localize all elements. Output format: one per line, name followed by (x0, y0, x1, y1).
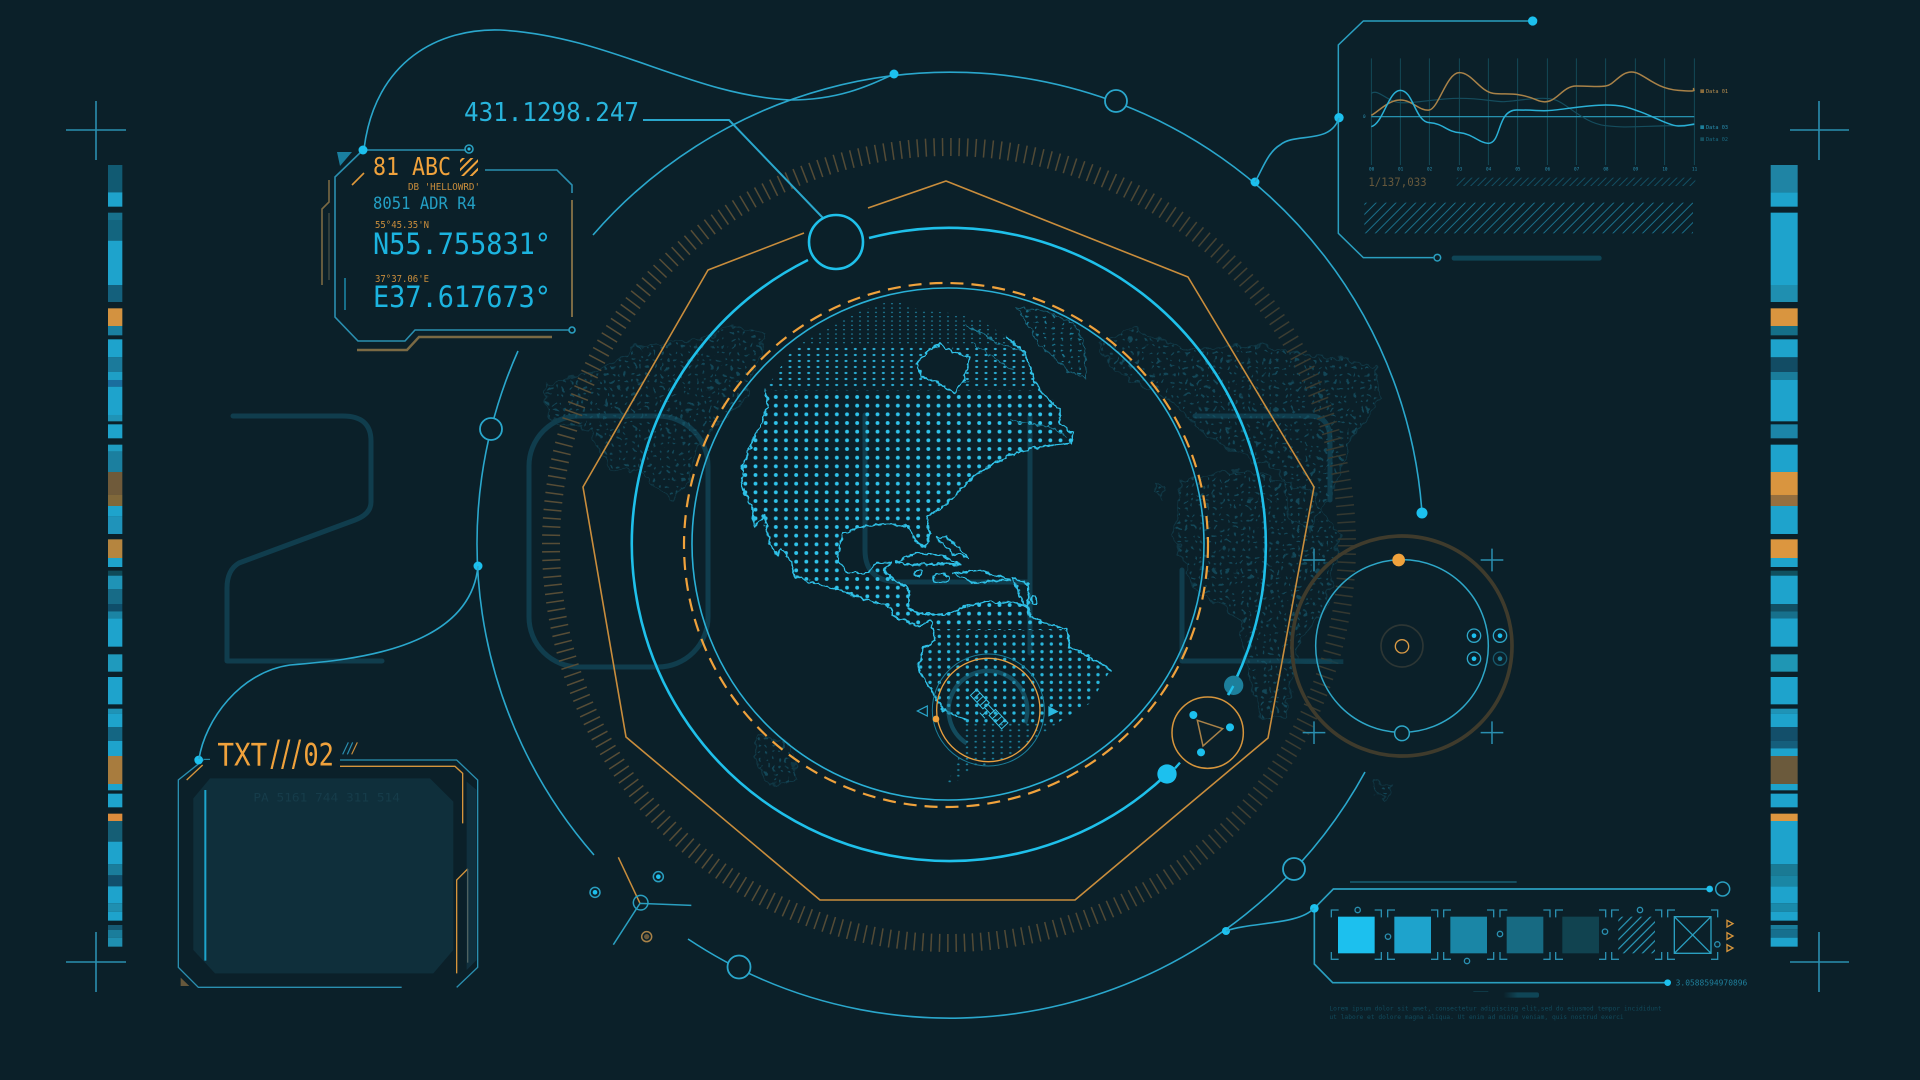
frame details (1334, 16, 1602, 261)
Arctic islands (960, 325, 1067, 437)
orange accents (187, 765, 468, 973)
panel: coordinates: 55°45.35'N (375, 220, 429, 231)
axis labels: 06 (1545, 167, 1551, 173)
swatch panel connector curve (1226, 908, 1314, 931)
crosshair: bottom right (1790, 932, 1849, 992)
crosshair: bottom left (66, 932, 126, 992)
hatched band small (1457, 178, 1695, 186)
target scope (917, 654, 1059, 766)
target dots (1467, 629, 1507, 665)
axis labels: 02 (1427, 167, 1433, 173)
world map: dim continents (545, 325, 1392, 800)
chart frame (1338, 21, 1533, 261)
panel: coordinates: 8051 ADR R4 (373, 194, 476, 214)
panel: swatches: ut labore et dolore magna aliqua. Ut enim ad minim veniam, quis nostrud exerci (1329, 1014, 1624, 1021)
axis labels: 03 (1457, 167, 1463, 173)
hatched band large (1364, 203, 1693, 233)
continent outline (742, 337, 1111, 720)
crossed swatch (1674, 917, 1711, 953)
dotted land fill (743, 303, 1108, 782)
axis labels: 09 (1633, 167, 1639, 173)
right level bar: upper (1771, 165, 1798, 534)
bright ring (632, 228, 1266, 861)
lower-left connector curve (199, 566, 478, 759)
axis line (1371, 115, 1694, 118)
orbit markers (474, 70, 1428, 978)
panel: swatches (1310, 882, 1748, 1021)
triangle widget (1157, 676, 1243, 784)
crosshair: top left (66, 101, 126, 160)
icon: satellite (967, 689, 1008, 732)
Caribbean islands (897, 537, 1037, 608)
panel: coordinates: 37°37.06'E (375, 274, 429, 285)
outer orbit arcs (477, 72, 1422, 1018)
axis labels: 0 (1363, 114, 1366, 120)
axis labels: 00 (1369, 167, 1375, 173)
small rings (1355, 907, 1720, 964)
chart grid (1371, 58, 1694, 165)
legend: Data 03 (1706, 125, 1728, 131)
orange triangles (1727, 920, 1733, 951)
chart connector curve (1255, 118, 1339, 182)
axis labels: 07 (1574, 167, 1580, 173)
handle with leader line (643, 120, 863, 269)
series: Data 01 (1371, 72, 1694, 115)
lorem text: Lorem ipsum dolor sit amet, consectetur adipiscing elit,sed do eiusmod tempor incididunt (1329, 1005, 1662, 1012)
top connector curve (364, 30, 894, 149)
series: Data 02 (1371, 92, 1694, 127)
orange octagon frame (583, 181, 1314, 900)
panel: coordinates (322, 145, 575, 350)
Greenland (1017, 307, 1087, 377)
legend: Data 01 (1706, 89, 1728, 95)
right level bar: lower (1771, 530, 1798, 947)
axis labels (1363, 114, 1698, 173)
scale readout: 1/137,033 (1368, 175, 1427, 189)
panel: TXT 02: /// (270, 735, 302, 775)
left level bar: lower (108, 539, 122, 947)
small bar (1503, 992, 1539, 998)
axis labels: 01 (1398, 167, 1404, 173)
left level bar: upper (108, 165, 122, 534)
value readout: 3.0588594970896 (1676, 979, 1748, 988)
faint caption: PA 5161 744 311 514 (253, 791, 400, 805)
panel frame (1350, 880, 1517, 884)
legend: Data 02 (1706, 137, 1728, 143)
panel: line chart (1334, 16, 1728, 261)
tripod widget (590, 857, 691, 945)
crosshair: top right (1790, 101, 1849, 160)
coordinate id text: 431.1298.247 (464, 98, 639, 128)
axis labels: 11 (1692, 167, 1698, 173)
axis labels: 10 (1662, 167, 1668, 173)
axis labels: 08 (1603, 167, 1609, 173)
panel: TXT 02 (178, 735, 478, 987)
panel: coordinates: N55.755831° (373, 227, 551, 261)
globe: Americas map (740, 303, 1112, 782)
series: Data 03 (1371, 90, 1694, 143)
axis labels: 04 (1486, 167, 1492, 173)
panel: TXT 02: 02 (303, 738, 334, 774)
panel fill (193, 778, 453, 973)
panel: coordinates: 81 ABC (373, 152, 451, 181)
swatches (1338, 917, 1375, 953)
legend (1700, 89, 1728, 143)
panel outline (178, 760, 478, 987)
heading: TXT (217, 738, 267, 774)
crosshair marks (1303, 549, 1503, 744)
swatch brackets (1331, 910, 1718, 959)
background year digits (227, 415, 1330, 667)
outer tick ring (551, 147, 1347, 943)
globe rim and dashed orange ring (684, 283, 1208, 807)
radar widget (1280, 536, 1512, 756)
panel: coordinates: DB 'HELLOWRD' (408, 182, 480, 193)
axis labels: 05 (1515, 167, 1521, 173)
panel: coordinates: E37.617673° (373, 280, 551, 314)
